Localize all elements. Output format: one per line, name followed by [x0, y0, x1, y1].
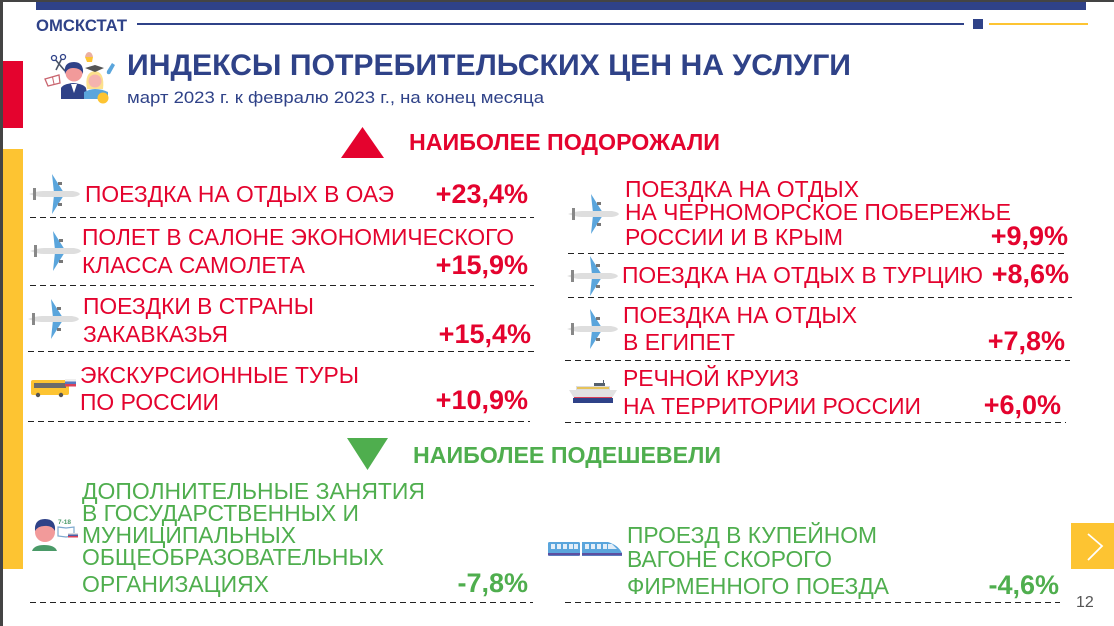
row: Egypt: В ЕГИПЕТ [623, 329, 735, 355]
row: additional classes: В ГОСУДАРСТВЕННЫХ И [82, 500, 359, 526]
row: river cruise: РЕЧНОЙ КРУИЗ [623, 364, 799, 391]
icon: plane [28, 299, 79, 339]
row: additional classes: МУНИЦИПАЛЬНЫХ [82, 522, 296, 548]
row: UAE: +23,4% [436, 179, 528, 209]
icon: red up triangle [341, 127, 384, 158]
icon: schoolchild with book: 7-18 [58, 519, 71, 526]
row: economy flight [30, 224, 534, 286]
left red bar [3, 61, 23, 128]
row: UAE [29, 174, 534, 218]
icon: green down triangle [347, 438, 388, 470]
row: Turkey: +8,6% [992, 259, 1069, 289]
left yellow bar [3, 149, 23, 569]
row: Egypt: +7,8% [988, 326, 1065, 356]
icon: schoolchild with book [32, 519, 78, 551]
heading: most expensive: НАИБОЛЕЕ ПОДОРОЖАЛИ [409, 129, 720, 155]
row: train: -4,6% [988, 570, 1059, 600]
row: train: ПРОЕЗД В КУПЕЙНОМ [627, 521, 877, 548]
row: Egypt: ПОЕЗДКА НА ОТДЫХ [623, 302, 857, 328]
row: economy flight: ПОЛЕТ В САЛОНЕ ЭКОНОМИЧЕСКОГО [82, 224, 514, 250]
row: Transcaucasia: +15,4% [439, 319, 531, 349]
icon: train [548, 542, 622, 556]
row: Russia tours: ПО РОССИИ [80, 389, 219, 415]
top navy bar [36, 2, 1086, 10]
row: Turkey: ПОЕЗДКА НА ОТДЫХ В ТУРЦИЮ [622, 262, 983, 288]
row: Transcaucasia [28, 293, 534, 352]
row: additional classes: ОБЩЕОБРАЗОВАТЕЛЬНЫХ [82, 544, 384, 570]
heading: cheapest: НАИБОЛЕЕ ПОДЕШЕВЕЛИ [413, 442, 721, 468]
row: Russia tours: ЭКСКУРСИОННЫЕ ТУРЫ [80, 362, 359, 388]
row: Black Sea: НА ЧЕРНОМОРСКОЕ ПОБЕРЕЖЬЕ [625, 199, 1011, 225]
icon: people and professions [45, 52, 115, 104]
row: river cruise [565, 364, 1066, 422]
row: train [548, 521, 1060, 602]
row: Turkey [567, 256, 1072, 298]
row: additional classes: -7,8% [457, 568, 528, 598]
icon: plane [29, 174, 80, 214]
row: river cruise: НА ТЕРРИТОРИИ РОССИИ [623, 393, 921, 419]
row: Black Sea: +9,9% [991, 221, 1068, 251]
row: economy flight: +15,9% [436, 250, 528, 280]
icon: plane [568, 194, 619, 234]
row: train: ФИРМЕННОГО ПОЕЗДА [627, 573, 890, 599]
row: UAE: ПОЕЗДКА НА ОТДЫХ В ОАЭ [85, 181, 394, 207]
page number: 12 [1076, 594, 1094, 611]
row: Transcaucasia: ПОЕЗДКИ В СТРАНЫ [83, 293, 314, 319]
icon: plane [567, 309, 618, 349]
subtitle: март 2023 г. к февралю 2023 г., на конец месяца [127, 88, 545, 107]
row: Black Sea [568, 176, 1068, 254]
row: Black Sea: ПОЕЗДКА НА ОТДЫХ [625, 176, 859, 202]
row: river cruise: +6,0% [984, 390, 1061, 420]
row: additional classes: ДОПОЛНИТЕЛЬНЫЕ ЗАНЯТИЯ [82, 478, 425, 504]
row: additional classes: ОРГАНИЗАЦИЯХ [82, 571, 269, 597]
row: Transcaucasia: ЗАКАВКАЗЬЯ [83, 321, 228, 347]
next-page button [1071, 523, 1114, 569]
icon: ship [569, 380, 617, 403]
icon: plane [30, 231, 81, 271]
icon: bus [31, 379, 76, 397]
title: ИНДЕКСЫ ПОТРЕБИТЕЛЬСКИХ ЦЕН НА УСЛУГИ [127, 49, 851, 82]
row: Black Sea: РОССИИ И В КРЫМ [625, 224, 843, 250]
row: additional classes [30, 478, 533, 602]
row: Russia tours: +10,9% [436, 385, 528, 415]
row: economy flight: КЛАССА САМОЛЕТА [82, 252, 306, 278]
row: train: ВАГОНЕ СКОРОГО [627, 546, 832, 572]
header rule with square marker [137, 19, 1088, 29]
row: Russia tours [28, 362, 530, 422]
organisation name: ОМСКСТАТ [36, 16, 128, 35]
row: Egypt [565, 302, 1070, 360]
icon: plane [567, 256, 618, 296]
